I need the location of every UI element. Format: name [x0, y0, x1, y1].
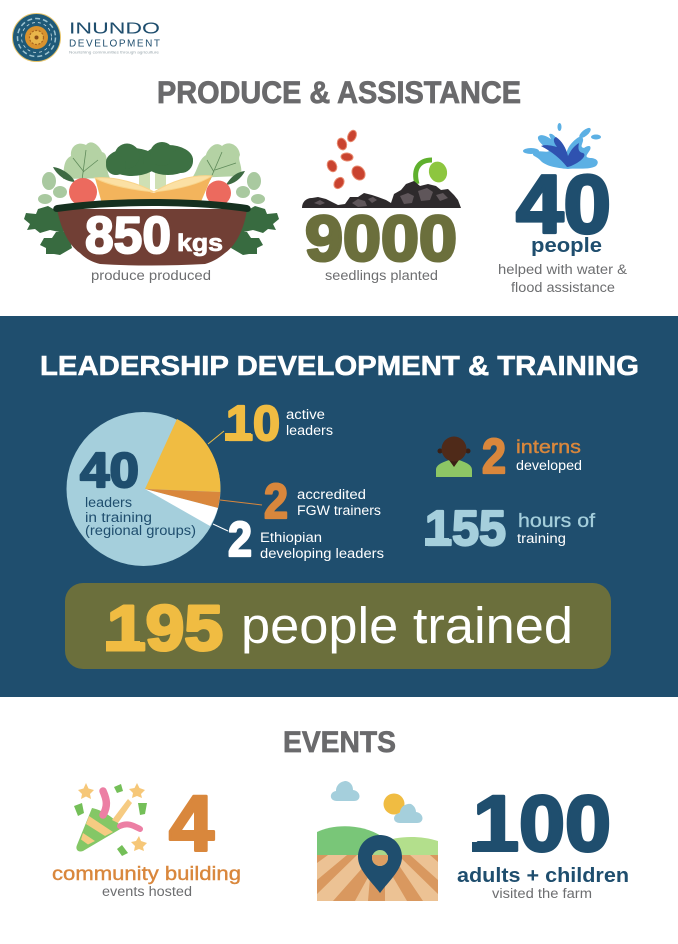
logo tagline: Nourishing communities through agriculture	[69, 50, 160, 54]
callout: 195 people trained	[65, 583, 611, 669]
hills	[385, 837, 438, 855]
pie chart: leaders	[66, 412, 262, 566]
icon: water splash	[523, 123, 601, 169]
label: people: people	[531, 235, 602, 257]
label: community building: community building	[52, 863, 241, 885]
number: 4: 4	[169, 778, 214, 868]
label: Ethiopian developing leaders	[260, 530, 384, 561]
label: accredited FGW trainers: FGW trainers	[297, 503, 381, 518]
icon: parsley leaves	[24, 206, 279, 255]
stat: 850 kgs produce	[24, 142, 279, 283]
number: 2 interns: 2	[482, 430, 506, 484]
heading: leadership development and training: LEADERSHIP DEVELOPMENT & TRAINING	[40, 350, 639, 381]
icon: sprout	[416, 160, 449, 184]
icon: falling seeds	[325, 129, 368, 190]
icon: bowl rim	[53, 199, 251, 212]
icon: mandala emblem	[12, 14, 60, 62]
label: leaders in training	[85, 495, 196, 538]
stat: 40 people	[498, 123, 627, 295]
heading: produce and assistance: PRODUCE & ASSISTANCE	[157, 74, 521, 110]
number: 100: 100	[473, 778, 611, 868]
number: 2 accredited trainers: 2	[264, 475, 288, 529]
caption: seedlings planted: seedlings planted	[325, 268, 438, 283]
pin hole	[372, 850, 388, 866]
label: accredited FGW trainers	[297, 487, 381, 518]
label: Ethiopian developing leaders: developing leaders	[260, 546, 384, 561]
icon: lettuce leaves	[63, 142, 241, 180]
icon: party popper	[74, 783, 147, 856]
field stripes	[317, 855, 438, 901]
label: active leaders: active	[286, 407, 325, 422]
caption: events hosted: events hosted	[102, 884, 192, 899]
caption: produce produced: produce produced	[91, 268, 211, 283]
panel background	[0, 316, 678, 697]
label: interns: interns	[516, 436, 581, 457]
label: active leaders	[286, 407, 333, 438]
number: 155 hours: 155	[425, 502, 506, 556]
stat: 4 community events	[52, 778, 241, 899]
icon: brown bowl	[57, 209, 247, 266]
icon: small herb sprigs	[38, 167, 265, 204]
label: accredited FGW trainers: accredited	[297, 487, 366, 502]
label: leaders in training: (regional groups)	[85, 523, 196, 538]
label: leaders in training: in training	[85, 510, 152, 525]
number: 850: 850	[85, 207, 171, 265]
field	[317, 855, 438, 901]
logo subtitle: DEVELOPMENT	[69, 38, 160, 50]
panel: leadership development and training	[0, 316, 678, 697]
pin	[358, 835, 402, 893]
number: 10 active leaders: 10	[226, 397, 280, 451]
icon: soil	[302, 181, 461, 208]
label: people trained: people trained	[241, 597, 573, 654]
icon: intern person	[436, 436, 472, 477]
label: developed: developed	[516, 458, 582, 473]
icon: broccoli	[106, 142, 193, 189]
logo wordmark: INUNDO	[69, 20, 160, 38]
label: Ethiopian developing leaders: Ethiopian	[260, 530, 322, 545]
label: training: training	[517, 531, 566, 546]
unit: kgs: kgs	[177, 230, 223, 257]
caption: water and flood assistance: flood assistance	[511, 280, 615, 295]
label: leaders in training: leaders	[85, 495, 132, 510]
label: adults and children: adults + children	[457, 865, 629, 887]
icon: tomatoes	[69, 178, 231, 206]
label: hours of: hours of	[518, 511, 596, 532]
caption: visited the farm: visited the farm	[492, 886, 592, 901]
sun	[384, 794, 404, 814]
caption: water and flood assistance: helped with water &	[498, 262, 627, 277]
caption: water and flood assistance	[498, 262, 627, 295]
icon: farm with location pin	[317, 781, 438, 901]
logo: Inundo Development	[12, 14, 160, 62]
icon: melon halves	[95, 176, 212, 204]
number: 9000: 9000	[305, 202, 457, 274]
stat: 100 farm visitors	[317, 778, 629, 901]
cloud left	[331, 781, 360, 801]
number: 195: 195	[107, 592, 223, 664]
label: active leaders: leaders	[286, 423, 333, 438]
number: 40 leaders: 40	[80, 444, 139, 498]
stat: 9000 seedlings	[302, 129, 461, 283]
cloud right	[394, 804, 423, 823]
number: 40: 40	[516, 158, 611, 250]
heading: events: EVENTS	[283, 726, 396, 759]
number: 2 Ethiopian leaders: 2	[228, 513, 252, 567]
